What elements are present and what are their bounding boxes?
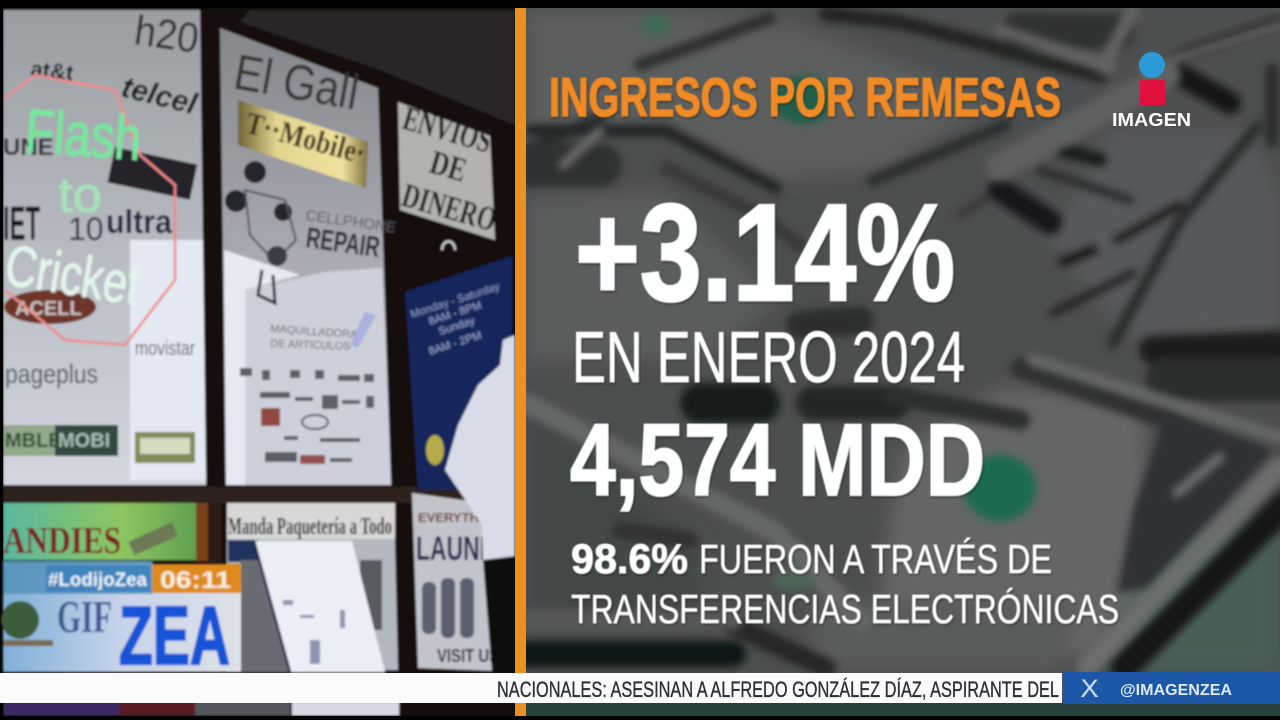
sign panel: carriers: MOBI [58, 430, 110, 452]
sign panel: carriers: pageplus [5, 359, 98, 389]
sign panel: T-Mobile cellphone repair: MAQUILLADORA [270, 323, 358, 341]
bill light strips [526, 10, 1280, 667]
sign: envios de dinero [398, 100, 500, 250]
sign: business hours: 8AM - 8PM [427, 299, 483, 328]
sign panel: carriers: ACELL [15, 298, 82, 320]
clock: 06:11 [160, 567, 231, 594]
bill light areas [526, 10, 1280, 670]
text block: electronic transfers: TRANSFERENCIAS ELECTRÓNICAS [571, 586, 1119, 632]
strip below ticker [3, 702, 399, 716]
green treasury seals [642, 15, 1036, 590]
lower signs: VISIT US [437, 646, 499, 666]
lower signs: EVERYTHING [418, 510, 502, 525]
bill dark bands [526, 14, 1280, 668]
sign panel: carriers: at&t [29, 56, 75, 86]
sign panel: carriers: IET [3, 198, 40, 251]
sign panel: carriers: UNE [3, 134, 54, 161]
lower signs [3, 493, 502, 671]
program graphic: hashtag, clock and ZEA logo [1, 560, 241, 682]
news ticker [0, 673, 1062, 703]
person in white hoodie [445, 335, 515, 672]
program graphic: hashtag, clock and ZEA logo: GIF [57, 591, 112, 642]
neon sign: Flash to Cricket [1, 75, 175, 345]
textured corner of bill [1117, 410, 1273, 593]
sign panel: T-Mobile cellphone repair: T··Mobile· [242, 105, 369, 170]
neon sign: Flash to Cricket: to [58, 167, 102, 223]
sign: envios de dinero: DE [426, 144, 471, 190]
panel: money photo background [526, 8, 1280, 716]
neon sign: Flash to Cricket: Flash [23, 97, 144, 174]
sign: envios de dinero: DINERO [398, 177, 500, 239]
sign: envios de dinero: ENVIOS [399, 100, 496, 160]
lower signs: ANDIES [3, 520, 121, 562]
neon sign: Flash to Cricket: Cricket [1, 233, 144, 318]
logo backdrop [3, 562, 241, 672]
social handle bar [1063, 672, 1280, 704]
hashtag: #LodijoZea [48, 570, 147, 591]
lower signs: LAUNI [416, 530, 486, 568]
gray counter and map board [240, 541, 385, 672]
sign: business hours [405, 256, 512, 490]
sign panel: carriers: h20 [132, 6, 202, 62]
title: INGRESOS POR REMESAS [549, 66, 1061, 128]
sign panel: T-Mobile cellphone repair: DE ARTICULOS [270, 338, 351, 353]
sign panel: T-Mobile cellphone repair: REPAIR [304, 222, 382, 264]
lower signs: Manda Paquetería a Todo [228, 514, 392, 540]
sign panel: carriers: ultra [106, 203, 173, 240]
sign: business hours: Monday - Saturday [409, 281, 502, 321]
stat label: date: EN ENERO 2024 [572, 318, 965, 398]
ZEA wordmark: ZEA [119, 589, 230, 682]
sign panel: carriers [3, 6, 210, 485]
text block: electronic transfers [571, 535, 1119, 632]
orange divider [515, 8, 526, 716]
sign: business hours: 8AM - 2PM [427, 329, 483, 358]
sign panel: T-Mobile cellphone repair: CELLPHONE [304, 207, 397, 237]
sign panel: carriers: movistar [135, 338, 195, 360]
sign panel: T-Mobile cellphone repair [220, 28, 397, 485]
news ticker: NACIONALES: ASESINAN A ALFREDO GONZÁLEZ DÍAZ, ASPIRANTE DEL [497, 677, 1059, 702]
text block: electronic transfers: 98.6% [571, 535, 688, 582]
logo: Imagen [1112, 52, 1191, 130]
sign: business hours: Sunday [437, 315, 477, 338]
photo: storefront with phone company signs [1, 6, 515, 716]
sign panel: carriers: telcel [118, 71, 201, 121]
stat: amount: 4,574 MDD [570, 403, 985, 517]
stat: percent growth: +3.14% [575, 176, 955, 330]
social handle bar: @IMAGENZEA [1120, 682, 1232, 699]
sign panel: T-Mobile cellphone repair: El Gall [230, 44, 363, 121]
logo: Imagen: IMAGEN [1112, 110, 1191, 130]
clock [152, 564, 241, 594]
sign panel: carriers: 10 [68, 211, 104, 247]
sign panel: carriers: MBLE [5, 430, 62, 452]
text block: electronic transfers: FUERON A TRAVÉS DE [699, 536, 1052, 582]
social handle bar: X [1080, 675, 1099, 703]
